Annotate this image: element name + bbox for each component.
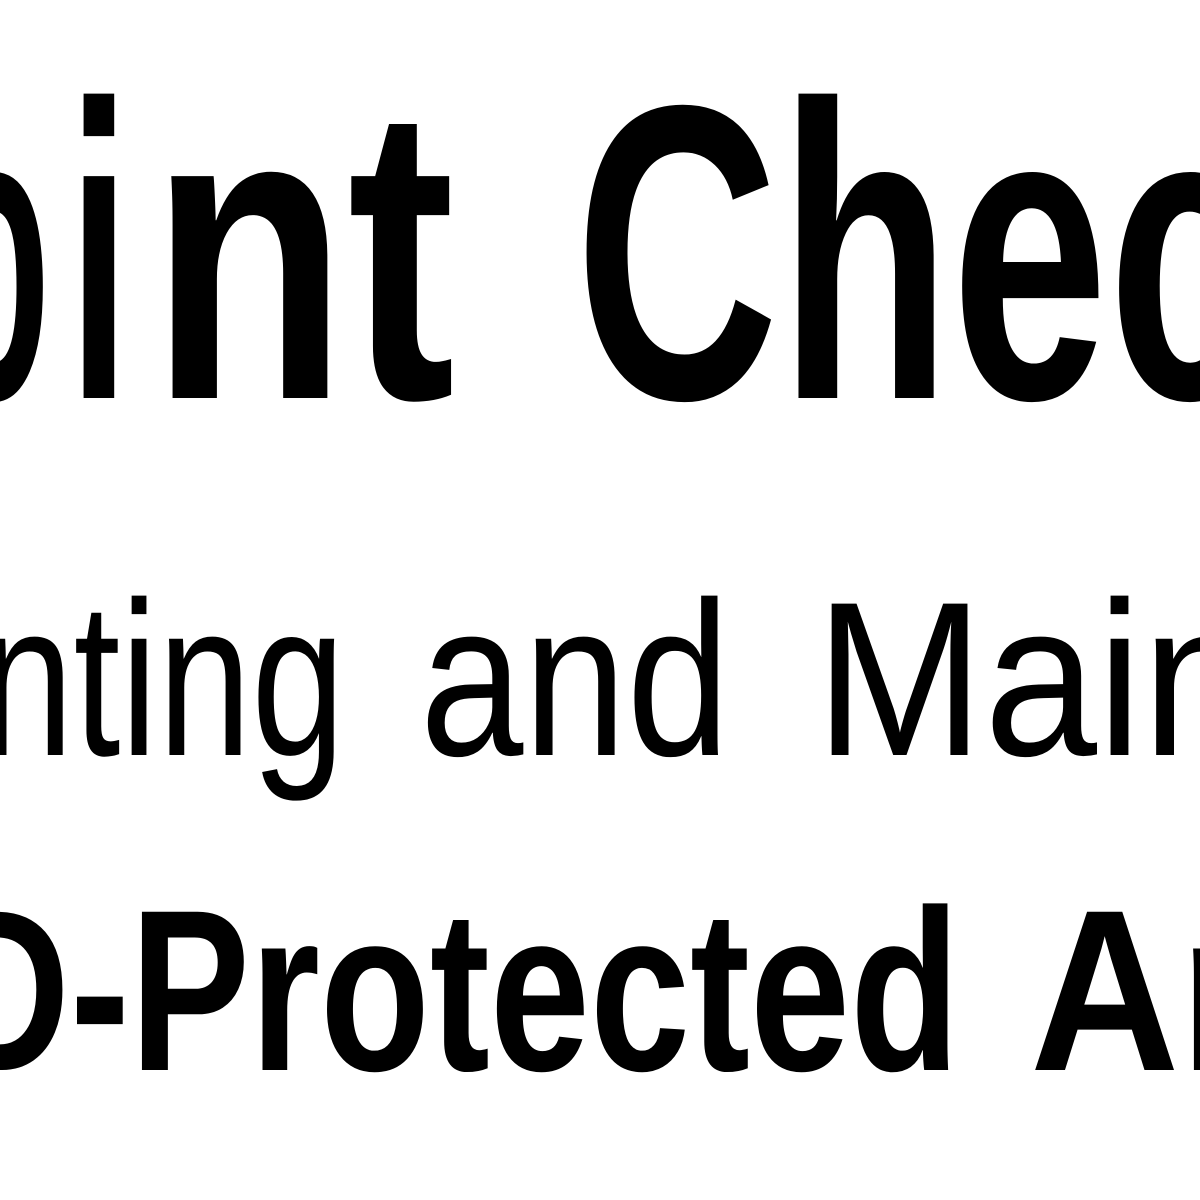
title line: Point Checklist: nt [150, 19, 455, 488]
title line: Point Checklist: i [68, 19, 130, 488]
title line: Point Checklist [0, 19, 1200, 488]
subtitle line: ...nting and Main... [0, 556, 1200, 802]
subtitle line: ...nting and Main...: and [420, 556, 730, 802]
